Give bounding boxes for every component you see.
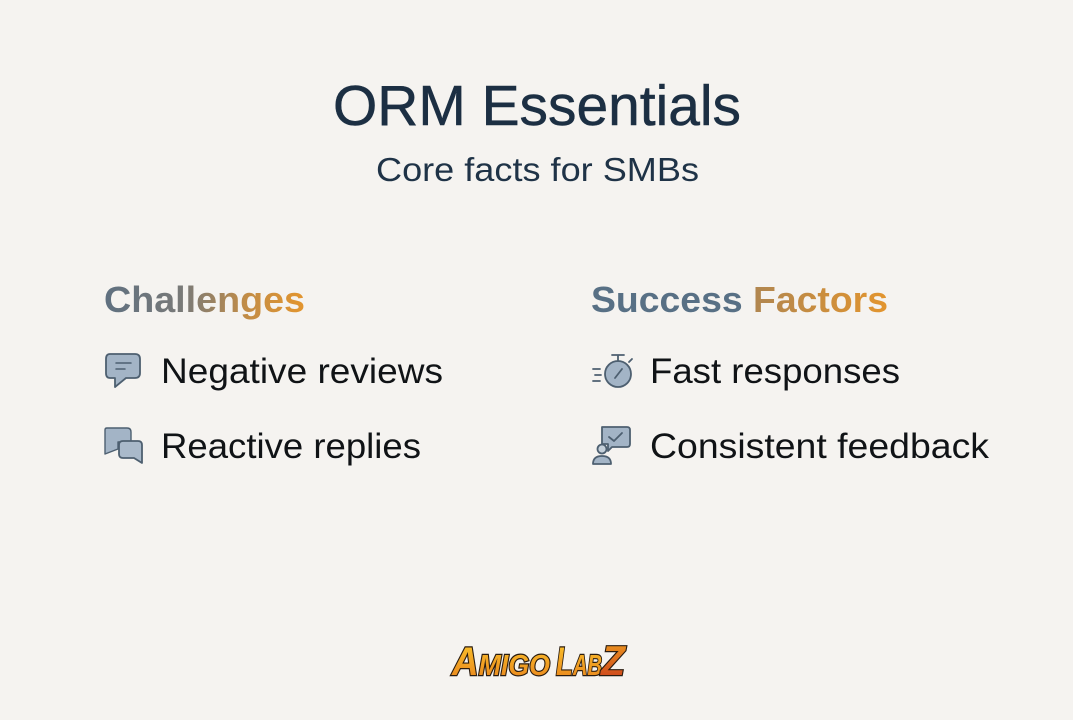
panel: challenges xyxy=(104,279,443,466)
text: reactive replies: Reactive replies xyxy=(161,427,421,466)
heading: challenges: Challenges xyxy=(104,279,305,320)
text: negative reviews: Negative reviews xyxy=(161,352,443,391)
heading: success factors: Success Factors xyxy=(591,279,888,320)
icon: stopwatch xyxy=(593,355,632,387)
logo: Amigo Labz: Z xyxy=(600,637,626,684)
icon: person with feedback bubble xyxy=(593,427,630,464)
title: ORM Essentials xyxy=(333,74,741,138)
text: consistent feedback: Consistent feedback xyxy=(650,427,990,466)
text: fast responses: Fast responses xyxy=(650,352,900,391)
icon: two speech bubbles xyxy=(105,428,142,463)
subtitle: Core facts for SMBs xyxy=(376,151,699,188)
panel: success factors xyxy=(591,279,990,466)
logo: Amigo Labz: LAB xyxy=(556,640,602,684)
logo: Amigo Labz: AMIGO xyxy=(451,640,550,684)
icon: speech bubble xyxy=(106,354,140,387)
logo: Amigo Labz xyxy=(451,637,626,684)
